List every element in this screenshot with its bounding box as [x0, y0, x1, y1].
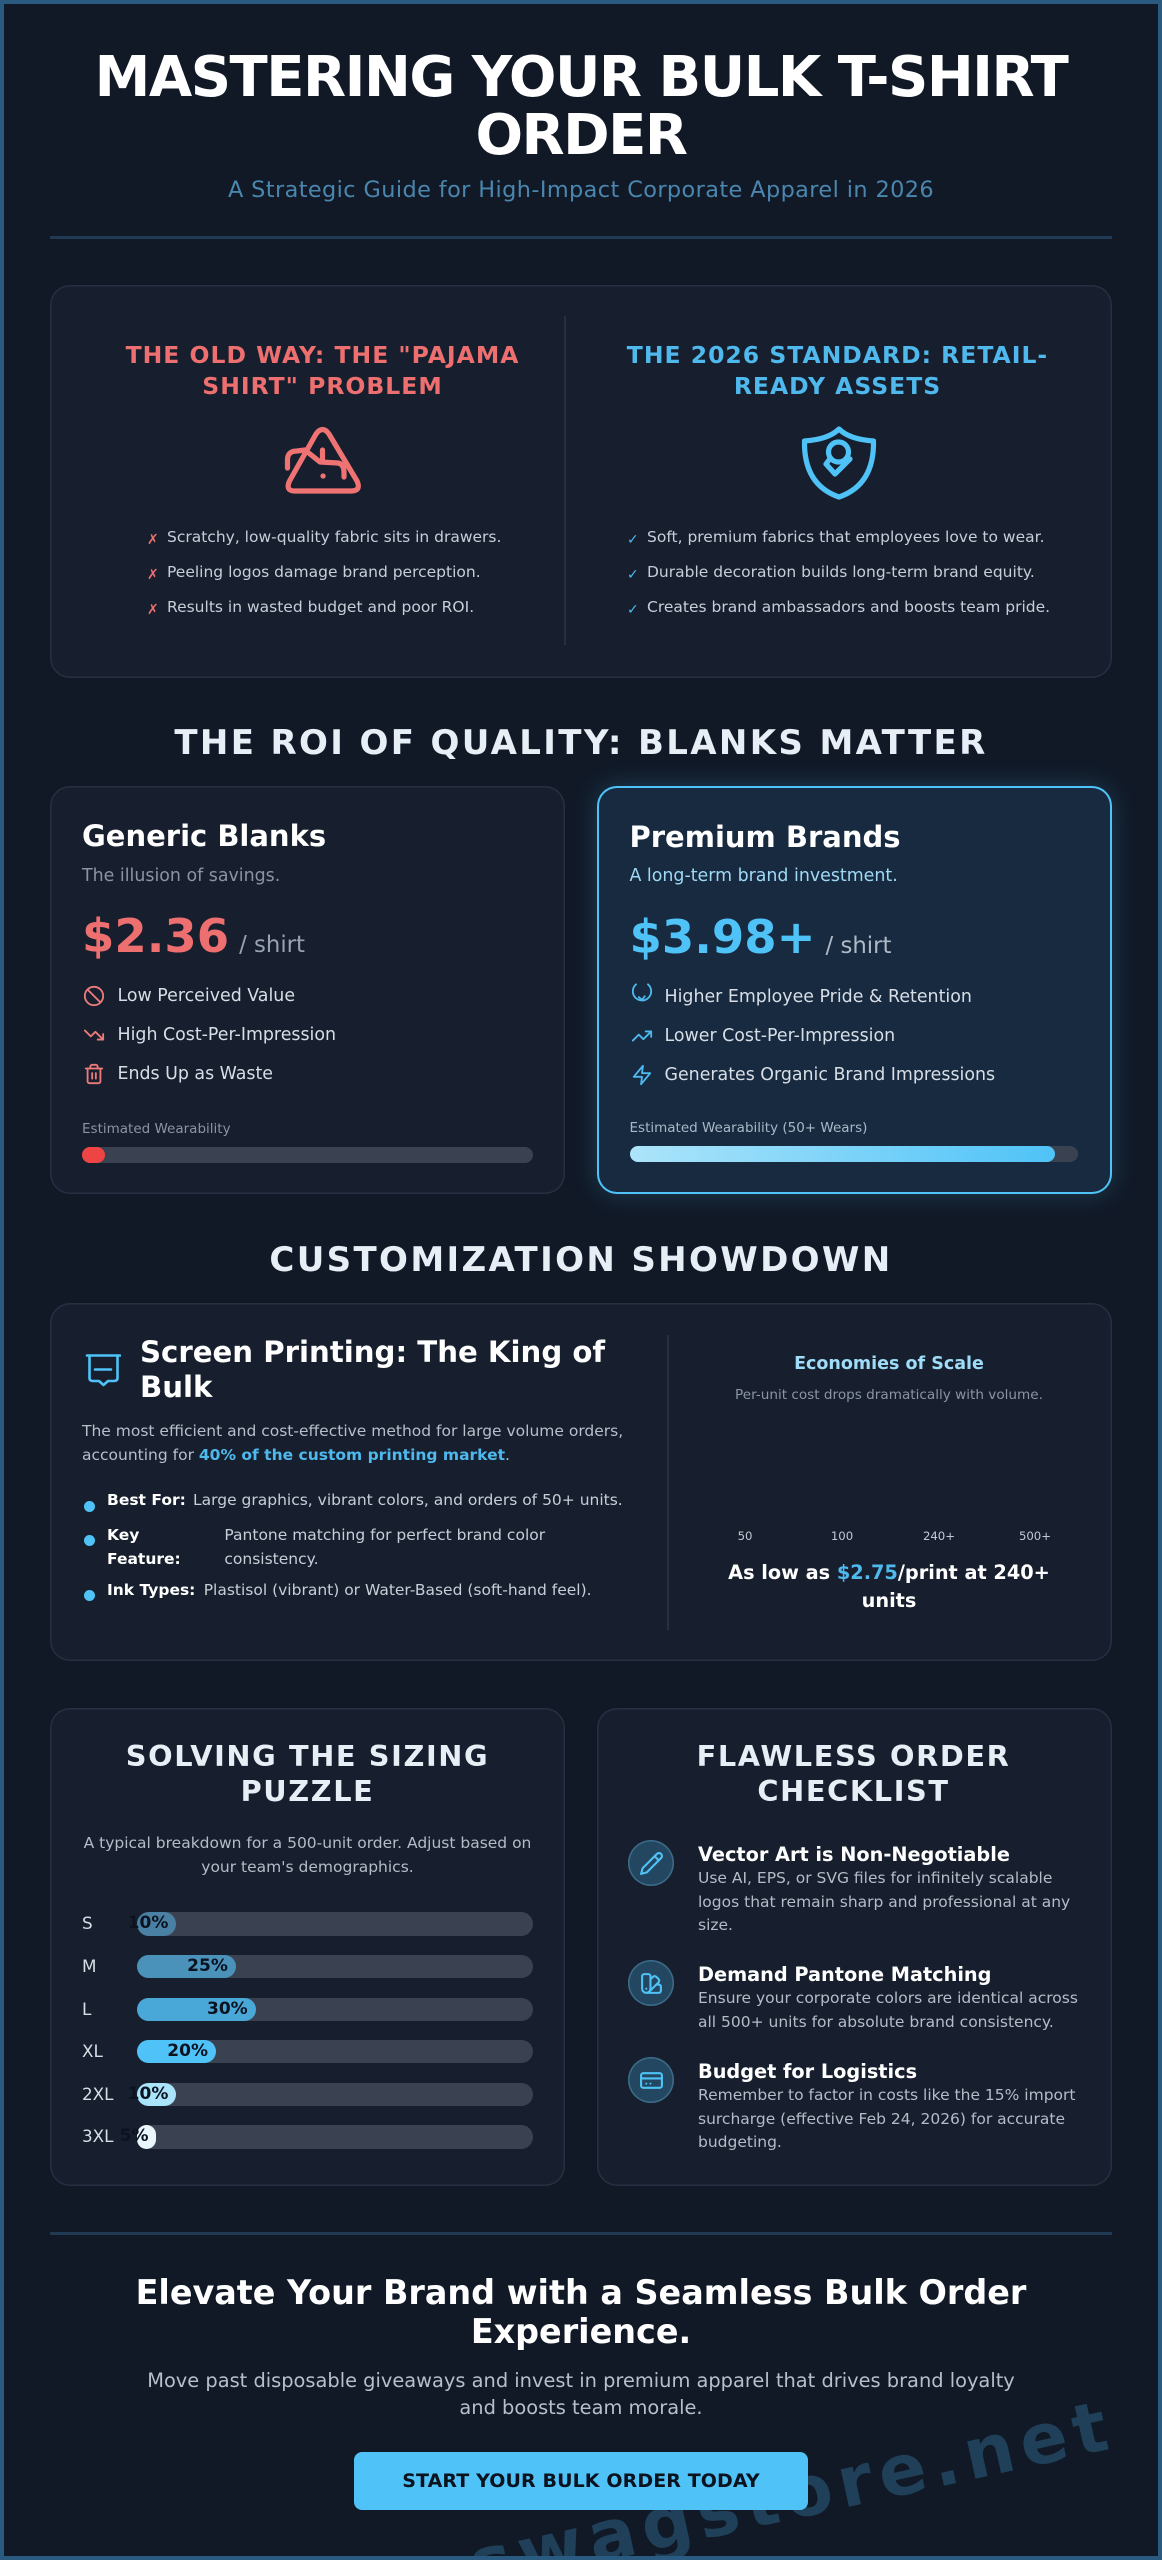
- list: screen printing specs: Ink Types:: [107, 1581, 195, 1599]
- icon: credit card: [628, 2057, 674, 2103]
- column: the old way: [126, 341, 519, 618]
- checklist item: vector art: Use AI, EPS, or SVG files for infinitely scalable: [698, 1869, 1052, 1887]
- chart axis labels: 240+: [923, 1529, 955, 1543]
- panel: old way vs 2026 standard: [50, 285, 1112, 678]
- icon: swatch book: [628, 1960, 674, 2006]
- list: old way drawbacks: Peeling logos damage brand perception.: [167, 563, 481, 581]
- heading: old way: [126, 341, 519, 400]
- feature: low perceived value: Low Perceived Value: [118, 986, 295, 1006]
- list: old way drawbacks: Scratchy, low-quality fabric sits in drawers.: [167, 528, 501, 546]
- card tagline: The illusion of savings.: [82, 866, 280, 886]
- checklist item: pantone: all 500+ units for absolute brand consistency.: [698, 2012, 1054, 2030]
- sizing description: A typical breakdown for a 500-unit order. Adjust based on: [84, 1834, 531, 1852]
- heading: sizing: PUZZLE: [241, 1774, 374, 1808]
- heading: customization showdown: CUSTOMIZATION SHOWDOWN: [269, 1240, 893, 1280]
- list: old way drawbacks: [147, 528, 501, 618]
- panel: premium brands: [597, 786, 1112, 1194]
- heading: screen printing: Screen Printing: The King of: [140, 1335, 605, 1369]
- bar: S: 10%: [128, 1913, 168, 1933]
- chart heading: Economies of Scale: [794, 1354, 984, 1374]
- bar: 3XL: 3XL: [82, 2126, 114, 2146]
- bar: XL: XL: [82, 2041, 103, 2061]
- list: screen printing specs: Pantone matching for perfect brand color: [224, 1526, 545, 1544]
- list: screen printing specs: Best For:: [107, 1491, 186, 1509]
- list: screen printing specs: Large graphics, vibrant colors, and orders of 50+ units.: [193, 1491, 623, 1509]
- bar: M: M: [82, 1956, 96, 1976]
- heading: sizing: SOLVING THE SIZING: [126, 1738, 489, 1772]
- checklist item: pantone: [628, 1960, 1078, 2030]
- chart callout: As low as $2.75/print at 240+: [728, 1561, 1050, 1584]
- bar: 2XL: [82, 2083, 533, 2106]
- checklist item: logistics: Remember to factor in costs like the 15% import: [698, 2086, 1075, 2104]
- button: start your bulk order: START YOUR BULK ORDER TODAY: [402, 2470, 760, 2492]
- wearability label: Estimated Wearability: [82, 1121, 231, 1137]
- panel: sizing puzzle: [50, 1708, 565, 2186]
- bar: S: S: [82, 1913, 93, 1933]
- chart subheading: Per-unit cost drops dramatically with volume.: [735, 1387, 1043, 1403]
- chart axis labels: 500+: [1019, 1529, 1051, 1543]
- list: 2026 standard benefits: ✓: [627, 567, 639, 583]
- checklist item: logistics: surcharge (effective Feb 24, 2026) for accurate: [698, 2110, 1065, 2128]
- checklist item: logistics: budgeting.: [698, 2133, 782, 2151]
- description: [82, 1422, 623, 1464]
- feature: high cost per impression: High Cost-Per-Impression: [118, 1025, 336, 1045]
- panel: screen printing: [50, 1303, 1112, 1661]
- feature: lower cost per impression: Lower Cost-Per-Impression: [664, 1026, 895, 1046]
- list: 2026 standard benefits: Creates brand ambassadors and boosts team pride.: [647, 598, 1050, 616]
- checklist item: logistics: [628, 2057, 1076, 2151]
- bar: 3XL: 5%: [120, 2126, 148, 2146]
- panel: generic blanks: [50, 786, 565, 1194]
- wearability bar: [82, 1147, 533, 1163]
- checklist item: vector art: Vector Art is Non-Negotiable: [698, 1843, 1010, 1866]
- subtitle: A Strategic Guide for High-Impact Corporate Apparel in 2026: [228, 177, 934, 203]
- description: The most efficient and cost-effective method for large volume orders,: [82, 1422, 623, 1440]
- title: ORDER: [475, 103, 687, 168]
- list: old way drawbacks: Results in wasted budget and poor ROI.: [167, 598, 474, 616]
- feature: higher employee pride: Higher Employee Pride & Retention: [664, 987, 972, 1007]
- title: [95, 45, 1069, 168]
- list: screen printing specs: Plastisol (vibrant) or Water-Based (soft-hand feel).: [204, 1581, 592, 1599]
- checklist item: logistics: Budget for Logistics: [698, 2060, 917, 2083]
- chart axis labels: [738, 1529, 1051, 1543]
- heading: ROI of quality: THE ROI OF QUALITY: BLANKS MATTER: [174, 723, 988, 763]
- checklist item: vector art: [628, 1840, 1070, 1934]
- icon: warning shirt: [284, 426, 361, 494]
- title: MASTERING YOUR BULK T-SHIRT: [95, 45, 1067, 110]
- heading: sizing: [126, 1738, 489, 1808]
- heading: checklist: [697, 1738, 1010, 1808]
- feature: organic impressions: Generates Organic Brand Impressions: [664, 1065, 995, 1085]
- card name: Premium Brands: [630, 820, 900, 854]
- description: accounting for 40% of the custom printing market.: [82, 1446, 510, 1464]
- heading: screen printing: [140, 1335, 606, 1404]
- bar: L: 30%: [207, 1998, 248, 2018]
- list: 2026 standard benefits: Soft, premium fabrics that employees love to wear.: [647, 528, 1045, 546]
- list: screen printing specs: [84, 1491, 623, 1601]
- wearability label: Estimated Wearability (50+ Wears): [630, 1120, 867, 1136]
- footer heading: Experience.: [471, 2312, 691, 2351]
- chart axis labels: 100: [831, 1529, 853, 1543]
- chart axis labels: 50: [738, 1529, 752, 1543]
- footer heading: Elevate Your Brand with a Seamless Bulk Order: [136, 2273, 1026, 2312]
- bar: M: [82, 1955, 533, 1978]
- checklist item: pantone: Demand Pantone Matching: [698, 1963, 991, 1986]
- icon: pencil: [628, 1840, 674, 1886]
- list: old way drawbacks: ✗: [147, 567, 159, 583]
- heading: 2026 standard: READY ASSETS: [734, 372, 941, 400]
- card tagline: A long-term brand investment.: [630, 866, 898, 886]
- heading: screen printing: Bulk: [140, 1370, 212, 1404]
- checklist item: pantone: Ensure your corporate colors are identical across: [698, 1989, 1078, 2007]
- list: old way drawbacks: ✗: [147, 602, 159, 618]
- heading: 2026 standard: THE 2026 STANDARD: RETAIL-: [627, 341, 1048, 369]
- heading: checklist: FLAWLESS ORDER: [697, 1738, 1010, 1772]
- button: start your bulk order: [354, 2452, 808, 2510]
- icon: shield with pin: [802, 426, 876, 500]
- bar: L: [82, 1998, 533, 2021]
- list: screen printing specs: consistency.: [224, 1550, 319, 1568]
- list: screen printing specs: Key: [107, 1526, 139, 1544]
- bar: M: 25%: [187, 1956, 228, 1976]
- bar: XL: [82, 2040, 533, 2063]
- bar: L: L: [82, 1998, 91, 2018]
- bar: 2XL: 2XL: [82, 2084, 114, 2104]
- footer heading: [136, 2273, 1026, 2351]
- wearability bar: [630, 1146, 1078, 1162]
- card name: Generic Blanks: [82, 819, 326, 853]
- heading: 2026 standard: [626, 341, 1048, 400]
- price: $2.36 / shirt: [82, 909, 305, 963]
- list: 2026 standard benefits: ✓: [627, 602, 639, 618]
- panel: order checklist: [597, 1708, 1112, 2186]
- checklist item: vector art: size.: [698, 1916, 733, 1934]
- heading: old way: SHIRT" PROBLEM: [202, 372, 443, 400]
- list: 2026 standard benefits: [627, 528, 1050, 618]
- heading: old way: THE OLD WAY: THE "PAJAMA: [126, 341, 519, 369]
- chart callout: [728, 1561, 1050, 1612]
- list: old way drawbacks: ✗: [147, 532, 159, 548]
- list: 2026 standard benefits: Durable decoration builds long-term brand equity.: [647, 563, 1035, 581]
- footer text: and boosts team morale.: [459, 2396, 703, 2418]
- heading: checklist: CHECKLIST: [757, 1774, 950, 1808]
- sizing description: your team's demographics.: [201, 1858, 414, 1876]
- column: the 2026 standard: [626, 341, 1050, 618]
- chart callout: units: [862, 1589, 916, 1612]
- footer text: Move past disposable giveaways and invest in premium apparel that drives brand loyalty: [147, 2368, 1015, 2392]
- list: screen printing specs: Feature:: [107, 1550, 181, 1568]
- sizing description: [84, 1834, 531, 1876]
- price: $3.98+ / shirt: [630, 910, 891, 964]
- bar: XL: 20%: [167, 2041, 208, 2061]
- bar: 2XL: 10%: [128, 2084, 168, 2104]
- feature: ends up as waste: Ends Up as Waste: [118, 1064, 273, 1084]
- bar: 3XL: [82, 2125, 533, 2149]
- icon: screen printing: [86, 1354, 121, 1386]
- footer text: [147, 2368, 1015, 2418]
- list: 2026 standard benefits: ✓: [627, 532, 639, 548]
- bar: S: [82, 1912, 533, 1936]
- checklist item: vector art: logos that remain sharp and professional at any: [698, 1892, 1070, 1910]
